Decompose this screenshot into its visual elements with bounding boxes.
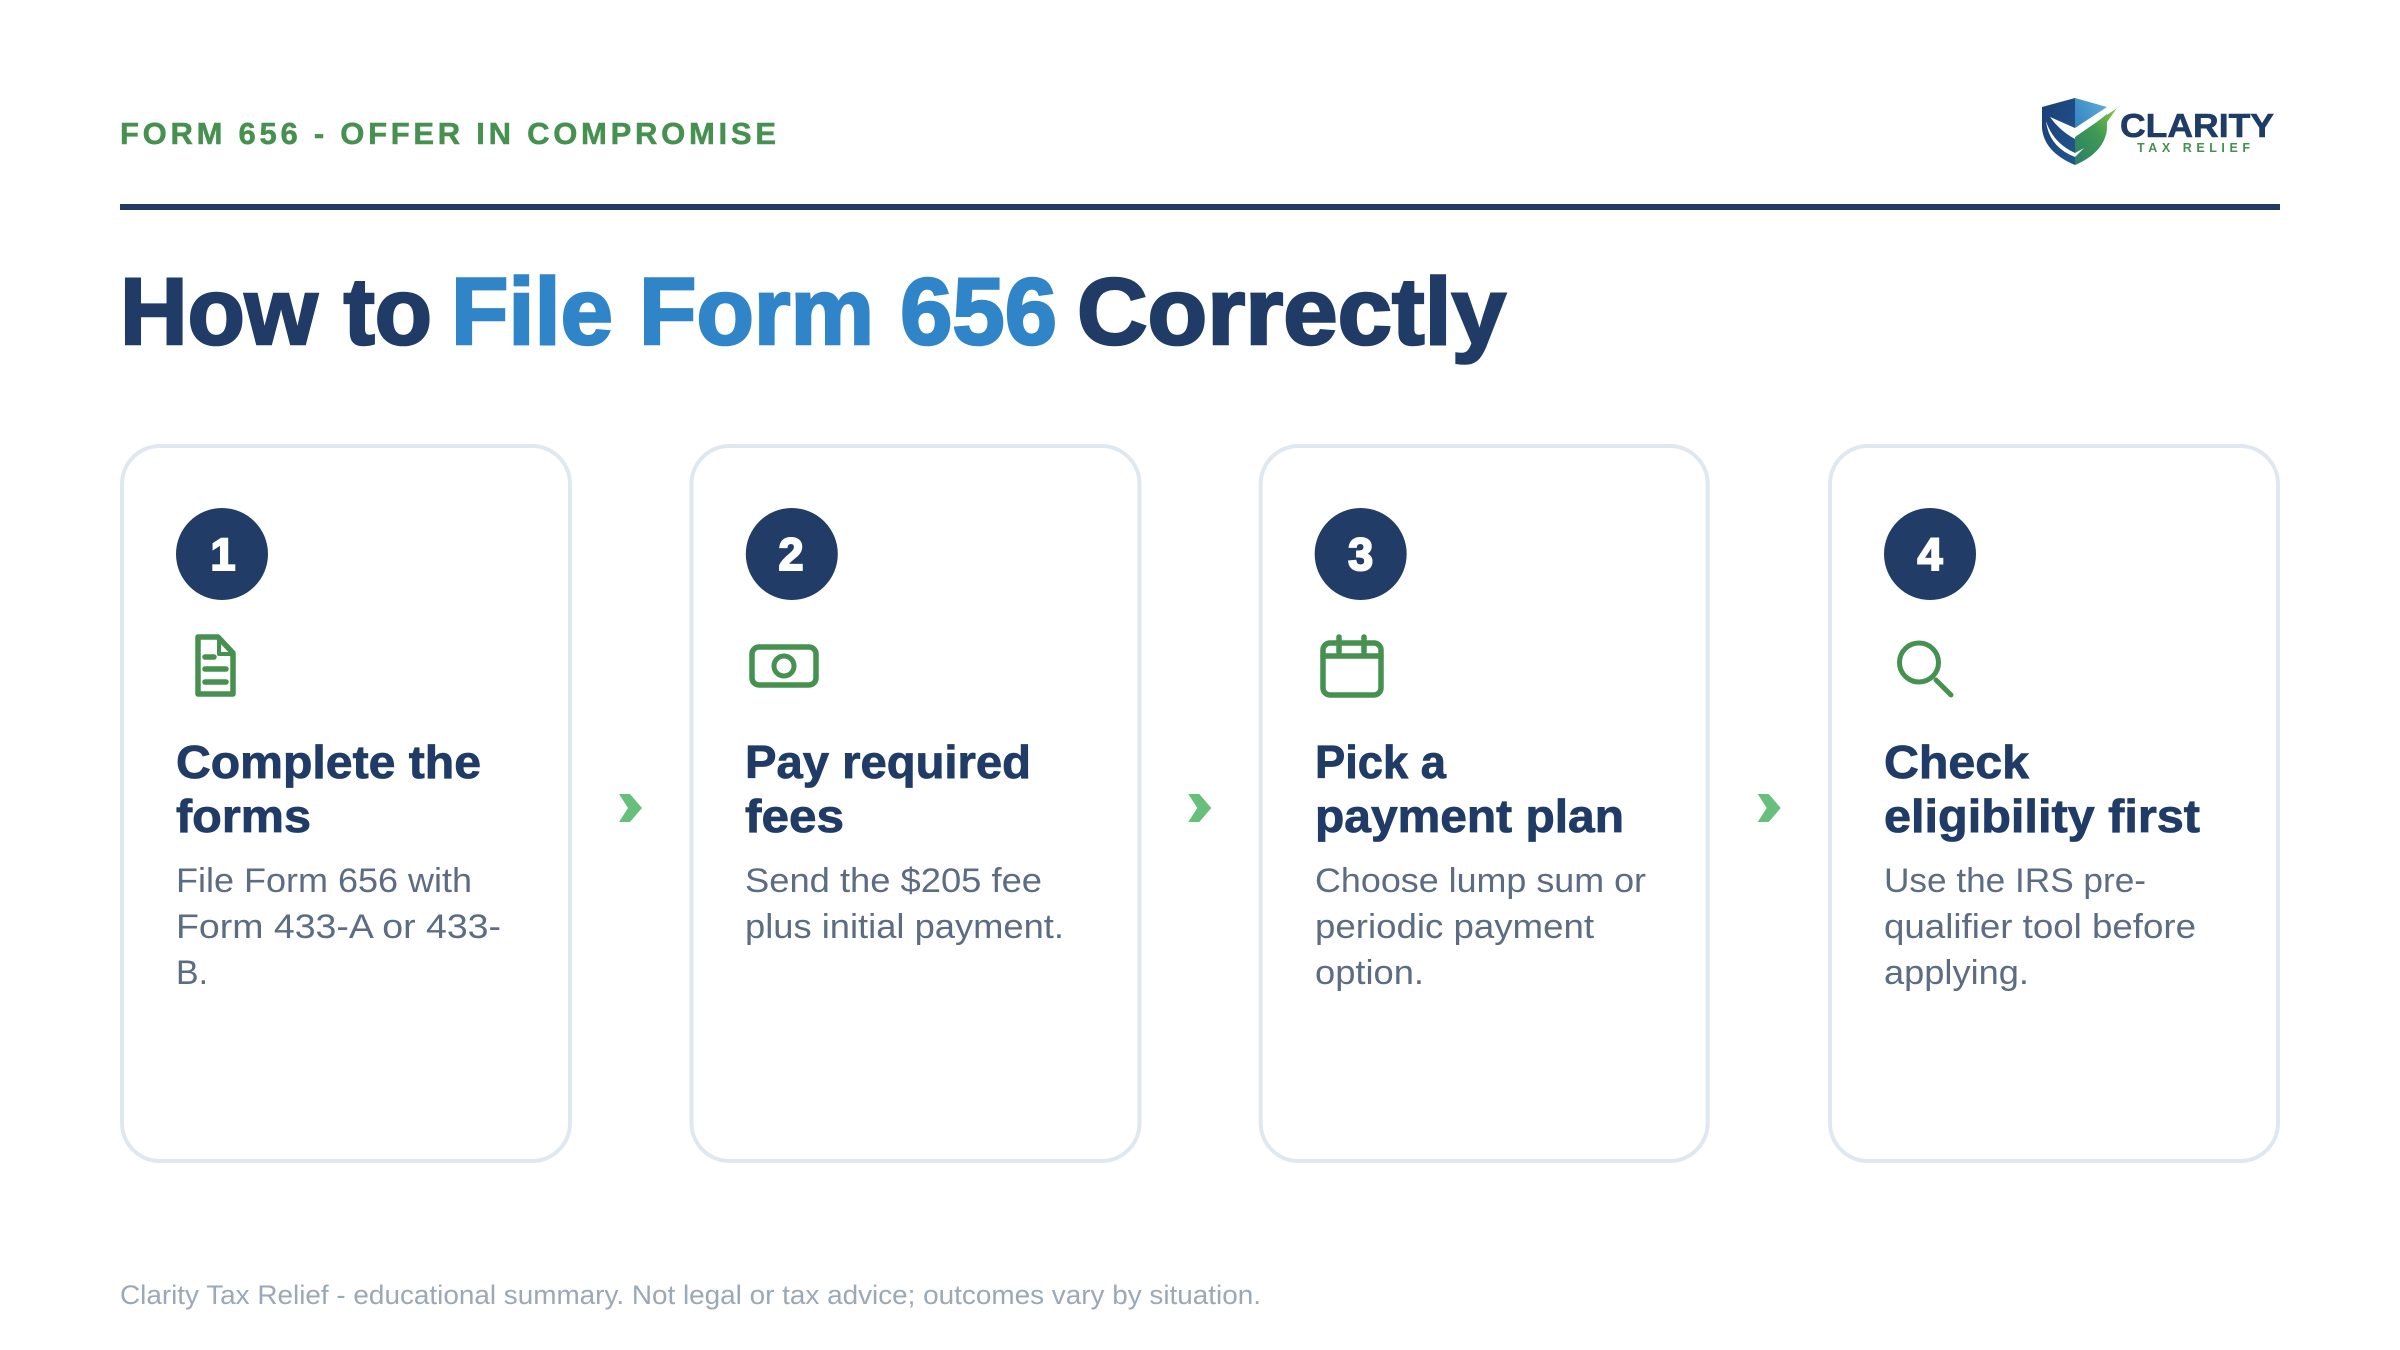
description step 4: qualifier tool before: [1884, 908, 2196, 946]
heading: check eligibility first: Check: [1884, 736, 2029, 788]
step number 4: [1884, 508, 1976, 600]
description step 1: [176, 862, 501, 992]
heading: check eligibility first: [1884, 736, 2200, 842]
arrow 1: [619, 794, 642, 822]
icon: magnifying glass: [1900, 643, 1951, 695]
description step 2: [745, 862, 1064, 946]
heading: complete the forms: [176, 736, 481, 842]
description step 3: periodic payment: [1315, 908, 1595, 946]
title: File Form 656: [451, 259, 1057, 365]
heading: complete the forms: forms: [176, 790, 311, 842]
logo wordmark: CLARITY: [2120, 107, 2274, 144]
description step 2: Send the $205 fee: [745, 862, 1042, 900]
footer disclaimer: Clarity Tax Relief - educational summary. Not legal or tax advice; outcomes vary by situation.: [120, 1280, 1261, 1310]
panel: step 1 complete the forms: [122, 446, 570, 1161]
arrow 2: [1188, 794, 1211, 822]
description step 3: option.: [1315, 954, 1424, 992]
icon: shield with check: [2042, 98, 2117, 165]
step number 3: [1315, 508, 1407, 600]
title: How to: [120, 259, 432, 365]
title: [120, 259, 1506, 365]
heading: pick a payment plan: Pick a: [1315, 736, 1446, 788]
step number 1: 1: [210, 529, 236, 580]
logo: Clarity Tax Relief: [2042, 98, 2274, 165]
panel: step 4 check eligibility first: [1830, 446, 2278, 1161]
panel: step 3 pick a payment plan: [1261, 446, 1708, 1161]
description step 1: B.: [176, 954, 208, 992]
title: Correctly: [1077, 259, 1506, 365]
heading: pay required fees: fees: [745, 790, 844, 842]
step number 4: 4: [1917, 529, 1943, 580]
description step 4: Use the IRS pre-: [1884, 862, 2146, 900]
heading: pay required fees: Pay required: [745, 736, 1031, 788]
heading: pay required fees: [745, 736, 1031, 842]
icon: banknote: [752, 647, 816, 685]
description step 4: [1884, 862, 2196, 992]
panel: step 2 pay required fees: [692, 446, 1140, 1161]
step number 3: 3: [1348, 529, 1373, 580]
description step 4: applying.: [1884, 954, 2029, 992]
heading: check eligibility first: eligibility first: [1884, 790, 2200, 842]
step number 1: [176, 508, 268, 600]
step number 2: [746, 508, 838, 600]
arrow 3: [1758, 794, 1781, 822]
logo tagline: TAX RELIEF: [2137, 141, 2250, 155]
eyebrow: form label: FORM 656 - OFFER IN COMPROMISE: [120, 116, 776, 151]
heading: pick a payment plan: payment plan: [1315, 790, 1624, 842]
icon: document: [198, 637, 233, 694]
description step 2: plus initial payment.: [745, 908, 1064, 946]
heading: pick a payment plan: [1315, 736, 1624, 842]
icon: calendar: [1323, 637, 1381, 695]
description step 3: [1315, 862, 1646, 992]
description step 3: Choose lump sum or: [1315, 862, 1646, 900]
description step 1: File Form 656 with: [176, 862, 472, 900]
step number 2: 2: [778, 529, 804, 580]
heading: complete the forms: Complete the: [176, 736, 481, 788]
description step 1: Form 433-A or 433-: [176, 908, 501, 946]
